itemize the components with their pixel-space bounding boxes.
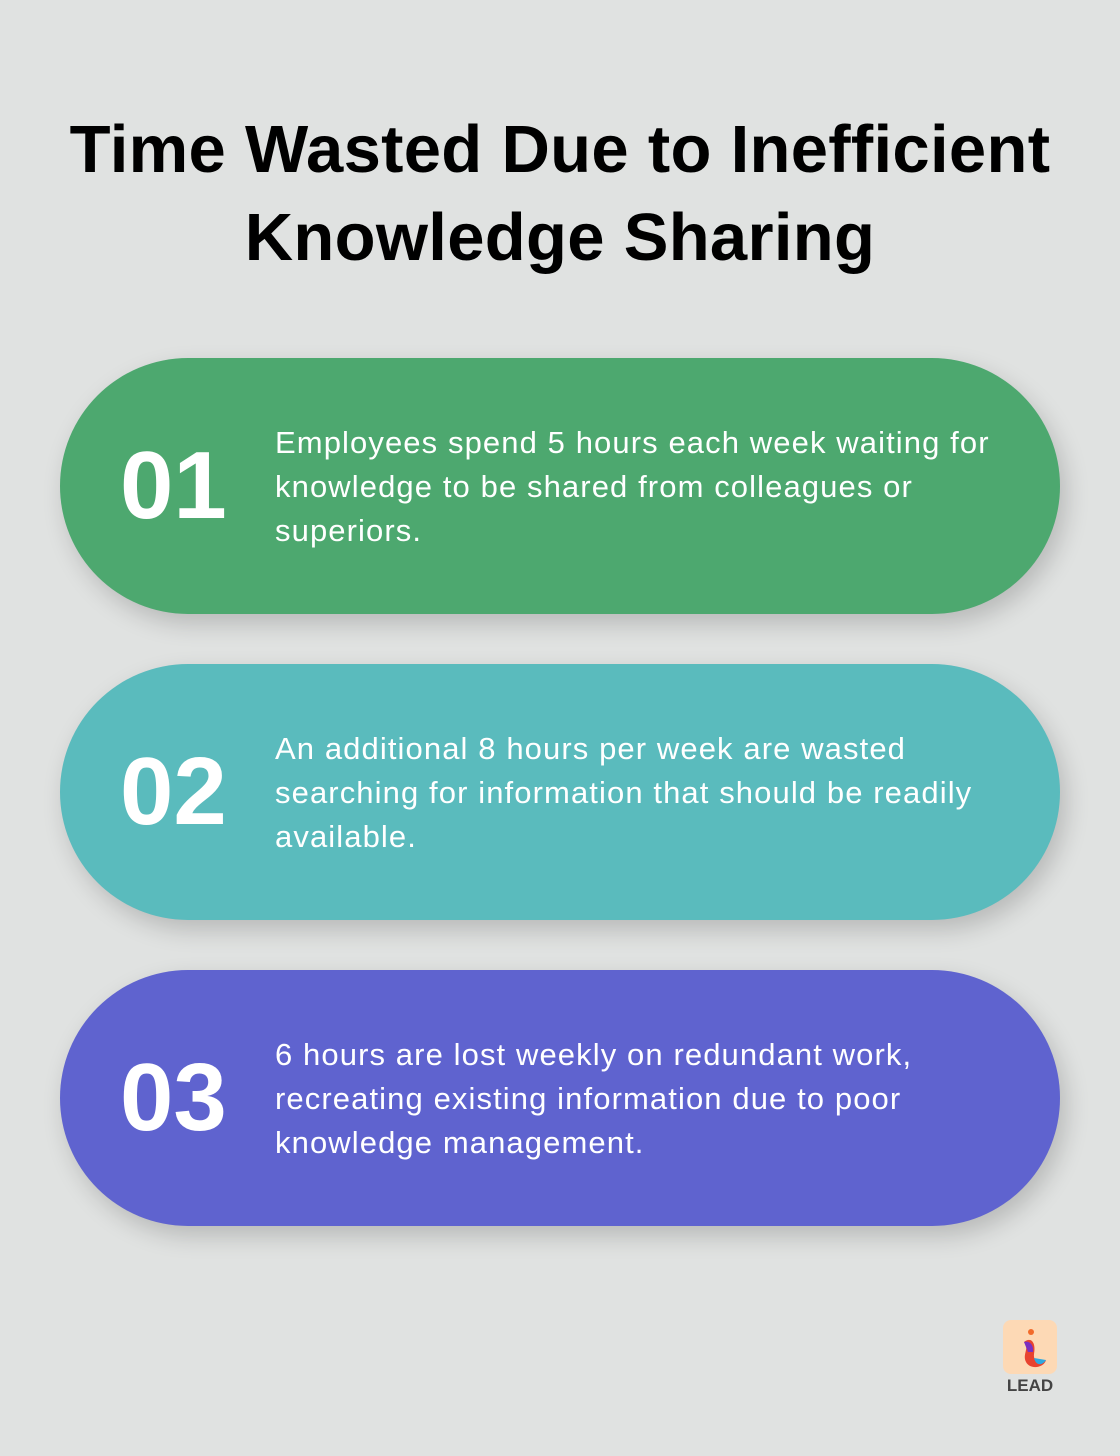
panel: item 03 <box>60 970 1060 1226</box>
text 03: knowledge management. <box>275 1125 644 1160</box>
icon: logo mark <box>1003 1320 1057 1374</box>
text 01: knowledge to be shared from colleagues or <box>275 469 913 504</box>
text 03: recreating existing information due to poor <box>275 1081 901 1116</box>
text 03 <box>275 1037 912 1160</box>
text 02: An additional 8 hours per week are wasted <box>275 731 906 766</box>
text 03: 6 hours are lost weekly on redundant work, <box>275 1037 912 1072</box>
text 02 <box>275 731 972 854</box>
text 01: Employees spend 5 hours each week waiting for <box>275 425 990 460</box>
title: Knowledge Sharing <box>245 200 875 275</box>
panel: item 01 <box>60 358 1060 614</box>
text 02: searching for information that should be readily <box>275 775 972 810</box>
number 01: 01 <box>120 432 227 539</box>
title <box>70 112 1050 275</box>
number 03: 03 <box>120 1044 227 1151</box>
logo <box>1003 1320 1057 1395</box>
panel: item 02 <box>60 664 1060 920</box>
text 02: available. <box>275 819 417 854</box>
title: Time Wasted Due to Inefficient <box>70 112 1050 187</box>
text 01: superiors. <box>275 513 422 548</box>
logo text: LEAD <box>1007 1376 1053 1395</box>
text 01 <box>275 425 990 548</box>
number 02: 02 <box>120 738 227 845</box>
